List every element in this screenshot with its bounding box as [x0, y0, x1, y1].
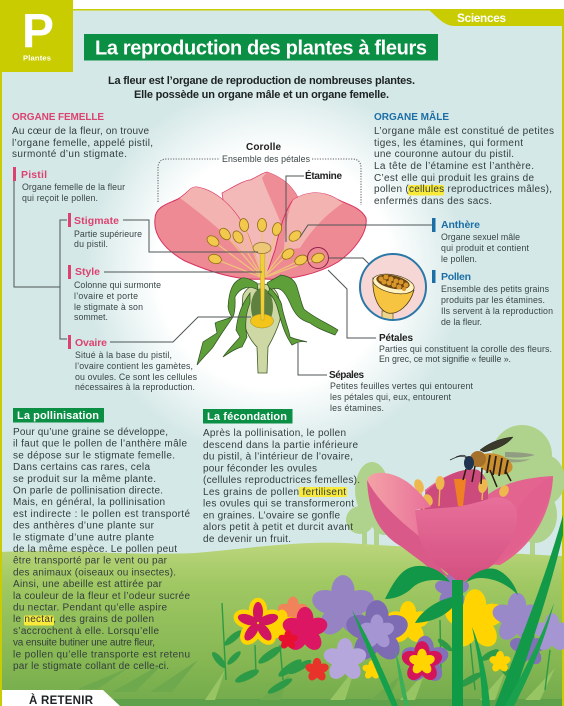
panel: la fécondation: du pistil, à l’intérieur de l’ovaire, [203, 452, 353, 462]
label: Pollen: Ensemble des petits grains [441, 284, 550, 294]
panel: la pollinisation: être transporté par le vent ou par [13, 556, 168, 567]
panel: la pollinisation: des anthères d’une plante sur [13, 521, 155, 532]
label: Style: Style [75, 266, 100, 278]
organe male intro: tiges, les étamines, qui forment [374, 138, 523, 149]
panel: la pollinisation: Pour qu’une graine se développe, [13, 427, 168, 438]
front petal [415, 497, 517, 583]
label: Sépales [329, 370, 474, 413]
panel: la fécondation: en graines. L’ovaire se gonfle [203, 510, 340, 521]
introduction: La fleur est l’organe de reproduction de nombreuses plantes. [108, 75, 415, 87]
panel: la fécondation: Après la pollinisation, le pollen [203, 428, 346, 439]
anthers [205, 218, 326, 267]
tab: Sciences: Sciences [457, 11, 506, 25]
inset: anther with pollen grains [360, 254, 426, 323]
panel: la fécondation: La fécondation [207, 411, 287, 423]
panel: la pollinisation: le pollen qu’elle transporte est retenu [13, 649, 190, 660]
centre petal [222, 172, 299, 275]
organe male intro: enfermés dans des sacs. [374, 196, 492, 207]
panel: la pollinisation: par le stigmate collant de celle-ci. [13, 661, 169, 672]
panel: la pollinisation: le stigmate d’une autre plante [13, 532, 154, 543]
long grass blades [495, 515, 563, 706]
label: Pistil: Organe femelle de la fleur [22, 182, 125, 192]
organe femelle intro: ORGANE FEMELLE [12, 112, 104, 123]
small meadow flowers [210, 572, 564, 696]
panel: la pollinisation: se produit sur la même plante. [13, 474, 156, 485]
label: Pollen: Ils servent à la reproduction [441, 306, 553, 316]
label: Style: l’ovaire et porte [74, 291, 138, 301]
panel: la pollinisation: il faut que le pollen de l’anthère mâle [13, 439, 187, 450]
organe male intro: ORGANE MÂLE [374, 110, 449, 123]
À retenir tab [2, 690, 120, 706]
big pink flower with stem and leaves [352, 469, 563, 706]
introduction: Elle possède un organe mâle et un organe femelle. [134, 89, 389, 101]
label: Pistil: Pistil [21, 169, 47, 181]
label: Sépales: Sépales [329, 370, 364, 381]
side petals [367, 477, 460, 583]
ovary [242, 284, 280, 373]
corolle dotted bracket [158, 159, 361, 205]
panel: la pollinisation: Ainsi, une abeille est attirée par [13, 579, 163, 590]
tab: letter P, Plantes [0, 0, 73, 72]
panel: la pollinisation: va ensuite butiner une autre fleur, [13, 638, 155, 649]
panel: la fécondation: (cellules reproductrices femelles). [203, 475, 360, 486]
label: Stigmate: du pistil. [74, 239, 108, 249]
organe femelle intro [12, 112, 153, 160]
label: Anthère [432, 218, 530, 264]
label: Pistil: qui reçoit le pollen. [22, 193, 98, 203]
label: Corolle [222, 142, 311, 164]
meadow landscape [2, 425, 564, 706]
filaments [213, 225, 318, 278]
label: Pistil [13, 167, 125, 203]
panel: la pollinisation: de la même espèce. Le pollen peut [13, 544, 177, 555]
organe femelle intro: surmonté d’un stigmate. [12, 149, 127, 160]
label: Pollen: Pollen [441, 271, 471, 283]
tab: Sciences [428, 9, 564, 26]
panel: la pollinisation: la couleur de la fleur et l’odeur sucrée [13, 591, 190, 602]
label: Pollen: de la fleur. [441, 317, 482, 327]
organe male intro: L’organe mâle est constitué de petites [374, 126, 554, 137]
label: Anthère: Anthère [441, 219, 480, 231]
panel: la pollinisation [13, 408, 190, 672]
label: Anthère: Organe sexuel mâle [441, 232, 520, 242]
label: Corolle: Ensemble des pétales [222, 154, 311, 164]
leader lines [104, 176, 432, 375]
label: Style: le stigmate à son [74, 302, 143, 312]
organe male intro [374, 110, 554, 207]
title: La reproduction des plantes à fleurs [95, 38, 427, 60]
label: Pollen [432, 270, 553, 327]
label: Ovaire: ou ovules. Ce sont les cellules [75, 372, 198, 382]
panel: la pollinisation: du nectar. Pendant qu’elle aspire [13, 602, 167, 614]
label: Style [68, 265, 161, 322]
connector lines: pistil tree [14, 181, 67, 339]
panel: la pollinisation: Mais, en général, la pollinisation [13, 497, 165, 508]
grass blades [205, 668, 555, 700]
back petals [425, 469, 553, 565]
organe femelle intro: l’organe femelle, appelé pistil, [12, 138, 153, 149]
organe male intro: La tête de l’étamine est l’anthère. [374, 161, 534, 172]
label: Ovaire [68, 335, 198, 392]
label: Pollen: produits par les étamines. [441, 295, 545, 305]
label: Ovaire: Ovaire [75, 337, 107, 349]
label: Ovaire: nécessaires à la reproduction. [75, 382, 195, 392]
leaves [385, 566, 450, 599]
panel: la pollinisation: La pollinisation [17, 410, 99, 422]
panel: la pollinisation: On parle de pollinisation directe. [13, 486, 163, 496]
label: Pétales: Parties qui constituent la corolle des fleurs. [379, 344, 552, 354]
organe male intro: pollen (cellules reproductrices mâles), [374, 184, 552, 195]
bee [450, 437, 535, 487]
panel: la pollinisation: des animaux (oiseaux ou insectes). [13, 567, 176, 578]
magnifier ring [308, 248, 328, 268]
label: Pétales: En grec, ce mot signifie « feuille ». [379, 354, 511, 364]
panel: la fécondation: pour féconder les ovules [203, 463, 317, 474]
label: Pétales: Pétales [379, 333, 413, 344]
label: Style: sommet. [74, 312, 108, 322]
left petal [155, 187, 263, 279]
stalks and small leaves [222, 603, 550, 690]
right petal [265, 193, 366, 279]
flower cross-section diagram [155, 172, 366, 373]
label: Style: Colonne qui surmonte [74, 280, 161, 290]
label: Ovaire: Situé à la base du pistil, [75, 350, 172, 360]
panel: la fécondation: Les grains de pollen fertilisent [203, 487, 346, 498]
label: Stigmate: Partie supérieure [74, 229, 142, 239]
panel: la fécondation: descend dans la partie inférieure [203, 440, 358, 451]
panel: la pollinisation: se dépose sur le stigmate femelle. [13, 450, 175, 461]
stem [452, 580, 463, 706]
label: Corolle: Corolle [246, 142, 281, 153]
label: Étamine: Étamine [305, 169, 342, 182]
panel: la pollinisation: le nectar, des grains de pollen [13, 614, 154, 625]
label: Ovaire: l’ovaire contient les gamètes, [75, 361, 193, 371]
panel: la fécondation: de devenir un fruit. [203, 534, 291, 545]
label: Stigmate: Stigmate [74, 215, 119, 227]
label: Stigmate [68, 213, 142, 249]
panel: la fécondation [203, 409, 360, 545]
panel: la pollinisation: Dans certains cas rares, cela [13, 462, 150, 473]
label: Sépales: les étamines. [330, 403, 384, 413]
panel: la fécondation: alors petit à petit et durcit avant [203, 522, 353, 533]
label: Sépales: Petites feuilles vertes qui entourent [330, 381, 474, 391]
pistil [260, 252, 265, 320]
panel: la pollinisation: s’accrochent à elle. Lorsqu’elle [13, 626, 159, 637]
label: Sépales: les pétales qui, eux, entourent [330, 392, 452, 402]
organe male intro: C’est elle qui produit les grains de [374, 173, 534, 184]
panel: la pollinisation: est indirecte : le pollen est transporté [13, 509, 190, 520]
stamens and pistil [403, 476, 511, 540]
label: Pétales [379, 333, 552, 364]
label: Anthère: le pollen. [441, 254, 477, 264]
label: Anthère: qui produit et contient [441, 243, 530, 253]
tab: letter P, Plantes: P [22, 5, 54, 58]
background trees [346, 425, 564, 555]
introduction [108, 75, 415, 101]
organe male intro: une couronne autour du pistil. [374, 149, 514, 160]
sepals [197, 275, 338, 365]
tab: letter P, Plantes: Plantes [23, 54, 51, 62]
panel: la fécondation: les ovules qui se transformeront [203, 498, 354, 510]
organe femelle intro: Au cœur de la fleur, on trouve [12, 126, 149, 137]
